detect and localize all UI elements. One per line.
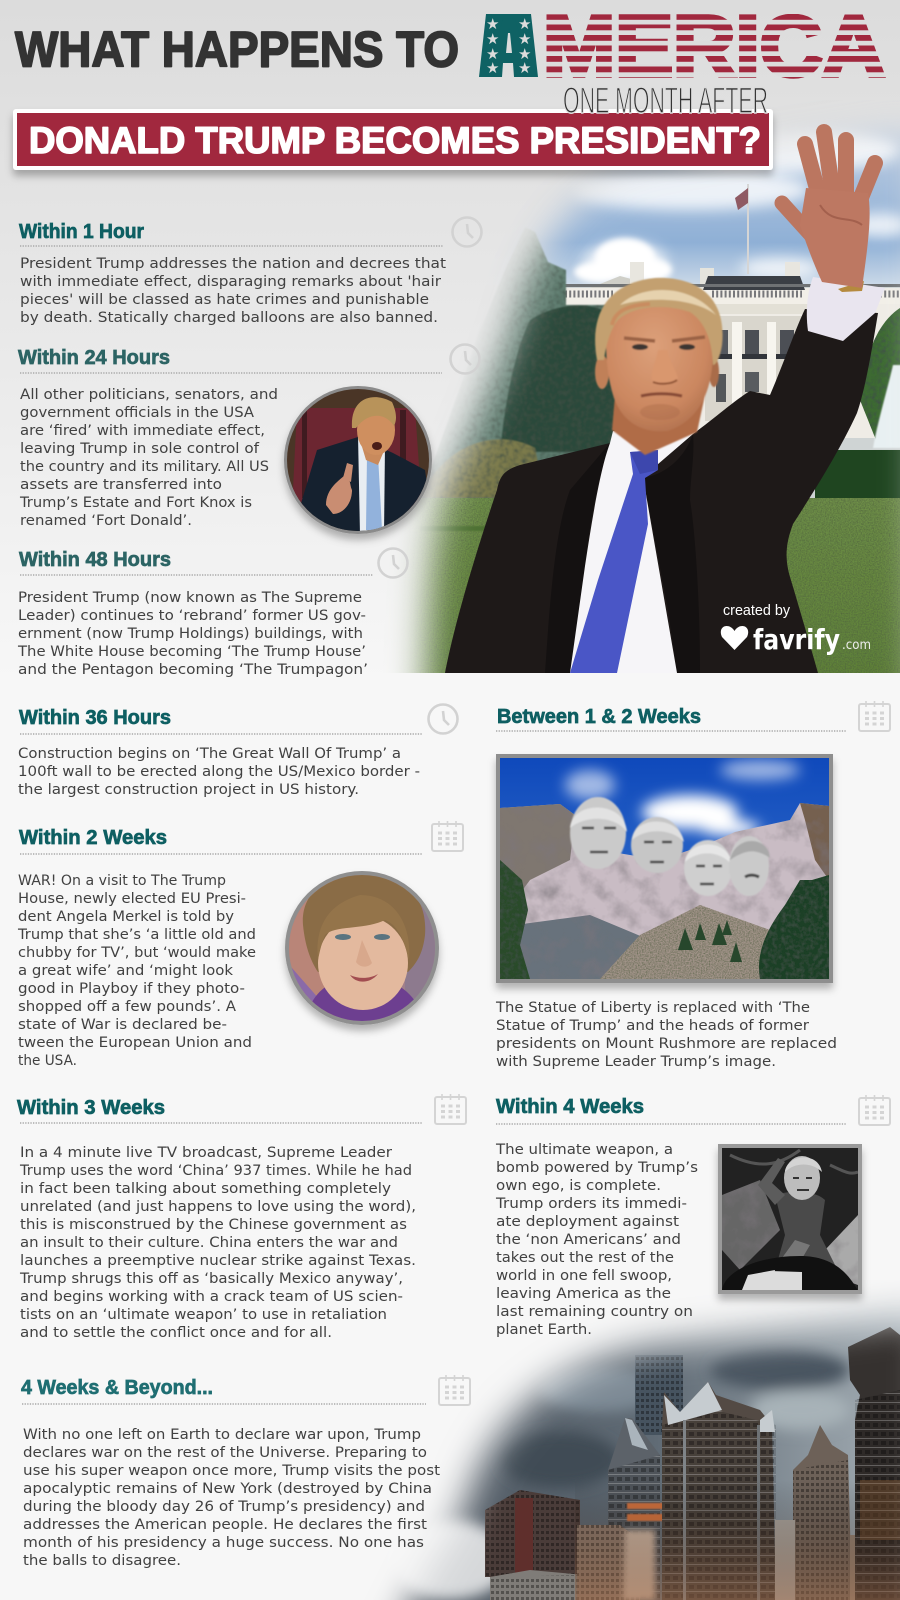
title: America in flag lettering: ★: [486, 59, 499, 77]
icon: clock: [450, 344, 480, 374]
text: within 48 hours: Leader) continues to ‘rebrand’ former US gov-: [18, 607, 366, 624]
text: within 4 weeks: last remaining country on: [496, 1303, 693, 1320]
icon: clock: [452, 218, 482, 246]
text: within 3 weeks: this is misconstrued by the Chinese government as: [20, 1216, 407, 1233]
text: between 1 and 2 weeks: presidents on Mount Rushmore are replaced: [496, 1035, 837, 1052]
text: within 3 weeks: [19, 1144, 416, 1341]
suit: [445, 309, 878, 673]
credit: created by favrify: .com: [842, 638, 871, 653]
title: [13, 0, 885, 170]
text: within 36 hours: the largest construction project in US history.: [18, 781, 359, 798]
text: 4 weeks and beyond: declares war on the rest of the Universe. Preparing to: [23, 1444, 427, 1461]
icon: calendar: [859, 1095, 890, 1125]
section: between 1 and 2 weeks: [495, 701, 890, 1070]
photo: ruined city skyline: [350, 1280, 900, 1600]
text: within 2 weeks: a great wife’ and ‘might look: [18, 962, 234, 979]
text: within 2 weeks: tween the European Union and: [18, 1034, 252, 1051]
section: within 4 weeks: Within 4 Weeks: [496, 1095, 644, 1118]
text: 4 weeks and beyond: use his super weapon once more, Trump visits the post: [23, 1462, 440, 1479]
section: within 24 hours: [18, 344, 480, 540]
text: within 4 weeks: world in one fell swoop,: [496, 1267, 672, 1284]
text: 4 weeks and beyond: month of his presidency a huge success. No one has: [23, 1534, 424, 1551]
text: within 2 weeks: shopped off a few pounds’. A: [18, 998, 236, 1015]
photo: Mount Rushmore with Trump heads: [496, 754, 833, 983]
title: America in flag lettering: ★: [518, 30, 531, 48]
text: within 4 weeks: leaving America as the: [496, 1285, 671, 1302]
credit: created by favrify: [721, 602, 871, 656]
title: America in flag lettering: ★: [486, 30, 499, 48]
text: within 48 hours: ernment (now Trump Holdings) buildings, with: [18, 625, 363, 642]
icon: calendar: [432, 821, 463, 851]
shirt and tie: [570, 431, 693, 673]
section: within 3 weeks: Within 3 Weeks: [17, 1096, 165, 1119]
text: within 3 weeks: Trump shrugs this off as ‘basically Mexico anyway’,: [19, 1270, 403, 1287]
text: within 4 weeks: ate deployment against: [496, 1213, 679, 1230]
text: within 3 weeks: launches a preemptive nuclear strike against Texas.: [20, 1252, 416, 1269]
text: within 4 weeks: The ultimate weapon, a: [495, 1141, 673, 1158]
section: within 1 hour: Within 1 Hour: [19, 220, 144, 243]
text: within 4 weeks: planet Earth.: [496, 1321, 592, 1338]
icon: heart: [721, 626, 748, 650]
text: 4 weeks and beyond: [23, 1426, 440, 1569]
icon: clock: [378, 548, 408, 578]
text: within 3 weeks: in fact been talking about something completely: [20, 1180, 391, 1197]
title: America in flag lettering: ★: [518, 59, 531, 77]
title: America in flag lettering: A: [484, 1, 534, 95]
title: America in flag lettering: ★: [518, 45, 531, 63]
text: between 1 and 2 weeks: Statue of Trump’ and the heads of former: [496, 1017, 809, 1034]
text: within 4 weeks: takes out the rest of the: [496, 1249, 674, 1266]
text: within 2 weeks: WAR! On a visit to The Trump: [18, 872, 226, 889]
text: within 3 weeks: and begins working with a crack team of US scien-: [20, 1288, 403, 1305]
text: within 36 hours: Construction begins on ‘The Great Wall Of Trump’ a: [18, 745, 401, 762]
section: 4 weeks and beyond: 4 Weeks & Beyond...: [21, 1376, 213, 1399]
text: within 24 hours: government officials in the USA: [20, 404, 254, 421]
text: within 24 hours: are ‘fired’ with immediate effect,: [20, 422, 265, 439]
text: within 24 hours: renamed ‘Fort Donald’.: [20, 512, 192, 529]
credit: created by favrify: created by: [723, 602, 790, 619]
text: within 2 weeks: good in Playboy if they photo-: [18, 980, 245, 997]
text: within 1 hour: by death. Statically charged balloons are also banned.: [20, 309, 438, 326]
text: within 2 weeks: chubby for TV’, but ‘would make: [18, 944, 256, 961]
text: within 48 hours: The White House becoming ‘The Trump House’: [17, 643, 366, 660]
icon: clock: [428, 704, 458, 734]
icon: calendar: [435, 1094, 466, 1124]
text: within 2 weeks: state of War is declared be-: [18, 1016, 227, 1033]
text: within 2 weeks: Trump that she’s ‘a little old and: [17, 926, 256, 943]
text: within 4 weeks: the ‘non Americans’ and: [496, 1231, 681, 1248]
title: America in flag lettering: ★: [486, 15, 499, 33]
icon: calendar: [439, 1375, 470, 1405]
text: within 3 weeks: In a 4 minute live TV broadcast, Supreme Leader: [20, 1144, 392, 1161]
text: 4 weeks and beyond: addresses the American people. He declares the first: [23, 1516, 427, 1533]
title: what happens to: WHAT HAPPENS TO: [15, 22, 459, 78]
text: within 3 weeks: and to settle the conflict once and for all.: [20, 1324, 332, 1341]
photo: Trump pointing in circle: [284, 385, 435, 540]
text: within 4 weeks: bomb powered by Trump’s: [496, 1159, 698, 1176]
text: within 24 hours: Trump’s Estate and Fort Knox is: [19, 494, 252, 511]
text: 4 weeks and beyond: apocalyptic remains of New York (destroyed by China: [23, 1480, 432, 1497]
credit: created by favrify: favrify: [753, 623, 840, 656]
title: America in flag lettering: MERICA: [543, 0, 885, 94]
text: 4 weeks and beyond: the balls to disagree.: [23, 1552, 181, 1569]
section: within 36 hours: Within 36 Hours: [19, 706, 171, 729]
section: within 2 weeks: [17, 821, 463, 1069]
icon: calendar: [859, 701, 890, 731]
photo: Trump riding the bomb: [718, 1144, 862, 1295]
hero photo: White House and lawn background: [380, 100, 900, 678]
banner: Donald Trump becomes president: DONALD TRUMP BECOMES PRESIDENT?: [29, 120, 761, 161]
text: within 24 hours: leaving Trump in sole control of: [20, 440, 260, 457]
text: between 1 and 2 weeks: [495, 999, 837, 1070]
title: America in flag lettering: ★: [518, 15, 531, 33]
neck and head: [595, 278, 723, 455]
text: within 4 weeks: [495, 1141, 698, 1338]
text: 4 weeks and beyond: With no one left on Earth to declare war upon, Trump: [23, 1426, 421, 1443]
section: within 1 hour: [19, 218, 482, 326]
text: within 2 weeks: dent Angela Merkel is told by: [18, 908, 234, 925]
text: within 36 hours: [18, 745, 420, 798]
section: within 36 hours: [18, 704, 458, 798]
text: within 1 hour: with immediate effect, disparaging remarks about 'hair: [20, 273, 441, 290]
text: between 1 and 2 weeks: with Supreme Leader Trump’s image.: [496, 1053, 776, 1070]
section: within 4 weeks: [495, 1095, 890, 1338]
text: within 48 hours: President Trump (now known as The Supreme: [18, 589, 362, 606]
text: within 48 hours: [17, 589, 368, 678]
section: within 3 weeks: [17, 1094, 466, 1341]
text: within 24 hours: [19, 386, 278, 529]
text: within 1 hour: pieces' will be classed as hate crimes and punishable: [20, 291, 429, 308]
section: within 24 hours: Within 24 Hours: [18, 346, 170, 369]
text: within 4 weeks: own ego, is complete.: [496, 1177, 661, 1194]
text: within 24 hours: assets are transferred into: [20, 476, 222, 493]
text: within 24 hours: the country and its military. All US: [20, 458, 269, 475]
text: within 2 weeks: House, newly elected EU Presi-: [18, 890, 246, 907]
section: within 48 hours: Within 48 Hours: [19, 548, 171, 571]
flag pole and flag: [735, 184, 749, 274]
text: between 1 and 2 weeks: The Statue of Liberty is replaced with ‘The: [495, 999, 810, 1016]
text: within 48 hours: and the Pentagon becoming ‘The Trumpagon’: [18, 661, 368, 678]
hero figure: Donald Trump waving: [445, 132, 885, 673]
text: within 4 weeks: Trump orders its immedi-: [495, 1195, 687, 1212]
section: between 1 and 2 weeks: Between 1 & 2 Weeks: [497, 705, 701, 728]
text: within 1 hour: [20, 255, 446, 326]
text: within 1 hour: President Trump addresses the nation and decrees that: [20, 255, 446, 272]
raised hand with cuff: [782, 132, 885, 341]
section: 4 weeks and beyond: [21, 1375, 470, 1569]
text: within 3 weeks: an insult to their culture. China enters the war and: [20, 1234, 398, 1251]
text: within 2 weeks: [17, 872, 256, 1069]
text: within 2 weeks: the USA.: [18, 1052, 77, 1069]
banner: Donald Trump becomes president: [13, 109, 773, 170]
text: within 3 weeks: Trump uses the word ‘China’ 937 times. While he had: [19, 1162, 412, 1179]
title: America in flag lettering: ★: [486, 45, 499, 63]
text: within 36 hours: 100ft wall to be erected along the US/Mexico border -: [18, 763, 420, 780]
photo: Angela Merkel in circle: [285, 870, 440, 1030]
text: within 3 weeks: unrelated (and just happens to love using the word),: [20, 1198, 416, 1215]
section: within 2 weeks: Within 2 Weeks: [19, 826, 167, 849]
text: 4 weeks and beyond: during the bloody day 26 of Trump’s presidency) and: [23, 1498, 425, 1515]
text: within 3 weeks: tists on an ‘ultimate weapon’ to use in retaliation: [20, 1306, 387, 1323]
section: within 48 hours: [17, 548, 408, 678]
text: within 24 hours: All other politicians, senators, and: [20, 386, 278, 403]
